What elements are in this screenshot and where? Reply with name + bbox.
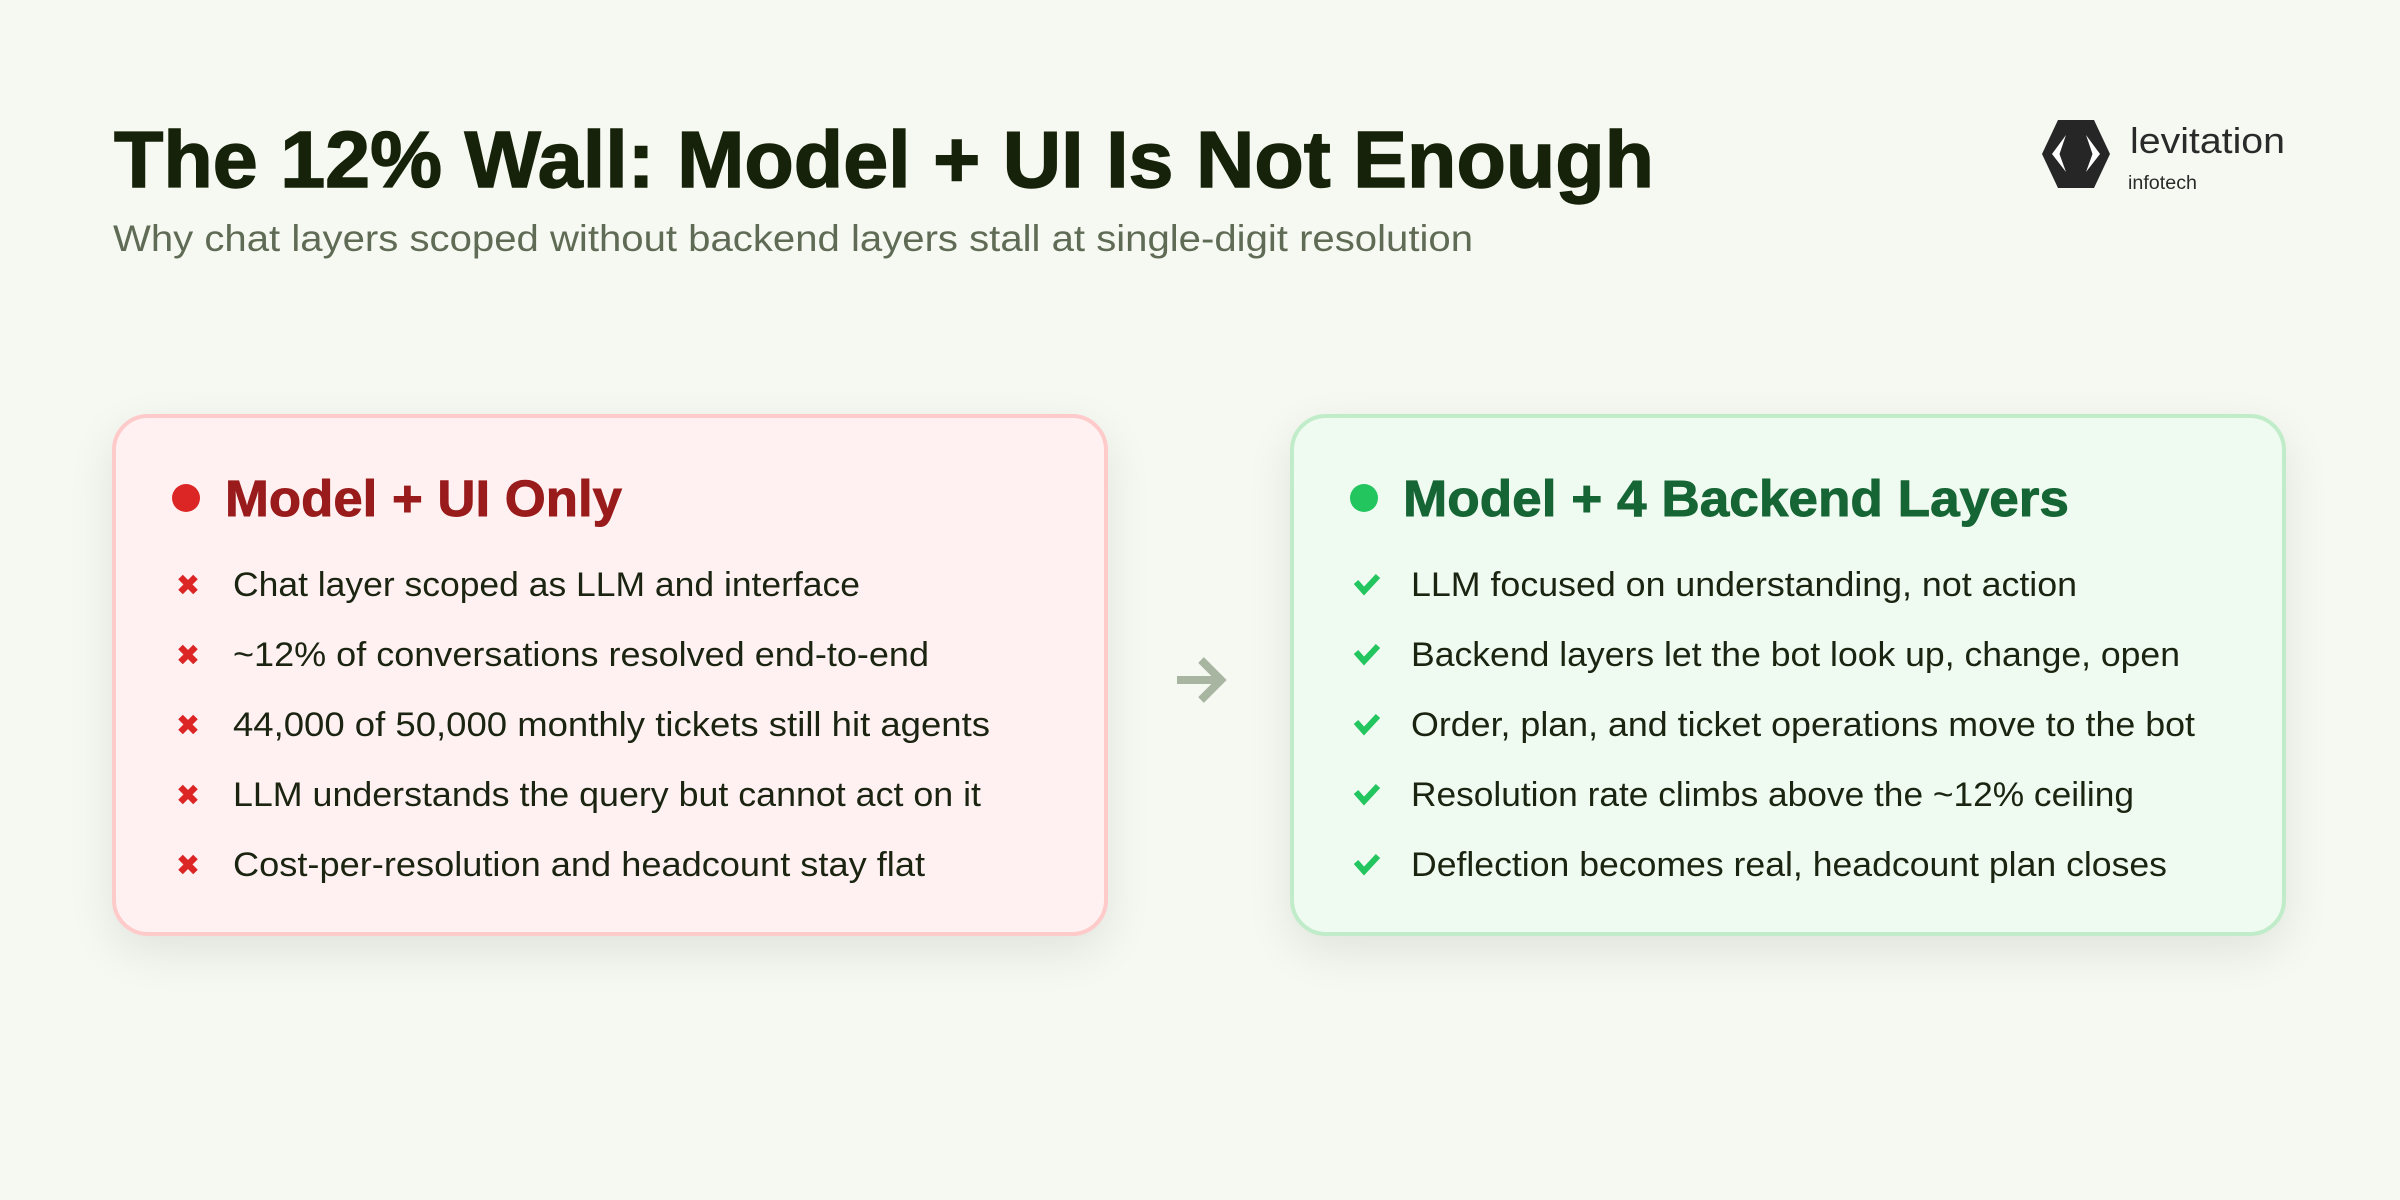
list item 5: Cost-per-resolution and headcount stay flat [233, 846, 926, 884]
panel: Model + UI Only [112, 414, 1108, 936]
list item 3: Order, plan, and ticket operations move to the bot [1411, 706, 2196, 744]
subtitle: Why chat layers scoped without backend layers stall at single-digit resolution [113, 218, 1473, 259]
list item 1: LLM focused on understanding, not action [1411, 566, 2077, 604]
list item 3: 44,000 of 50,000 monthly tickets still hit agents [233, 706, 990, 744]
panel heading: Model + 4 Backend Layers: Model + 4 Backend Layers [1403, 470, 2069, 527]
title: The 12% Wall: Model + UI Is Not Enough [114, 115, 1654, 204]
logo wordmark: levitation [2130, 120, 2285, 161]
list: failure points [180, 566, 990, 884]
logo wordmark [2128, 120, 2285, 194]
list item 2: ~12% of conversations resolved end-to-end [233, 636, 929, 674]
logo: levitation infotech [2042, 120, 2285, 194]
panel: Model + 4 Backend Layers [1290, 414, 2286, 936]
list item 1: Chat layer scoped as LLM and interface [233, 566, 860, 604]
icon: hexagon logo mark [2042, 120, 2110, 188]
list: benefits [1356, 566, 2196, 884]
panel heading: Model + UI Only: Model + UI Only [225, 470, 623, 527]
list item 2: Backend layers let the bot look up, change, open [1411, 636, 2180, 674]
list item 4: Resolution rate climbs above the ~12% ceiling [1411, 776, 2134, 814]
arrow [1177, 657, 1226, 703]
list item 4: LLM understands the query but cannot act on it [233, 776, 982, 814]
logo wordmark: infotech [2128, 173, 2197, 194]
list item 5: Deflection becomes real, headcount plan closes [1411, 846, 2167, 884]
